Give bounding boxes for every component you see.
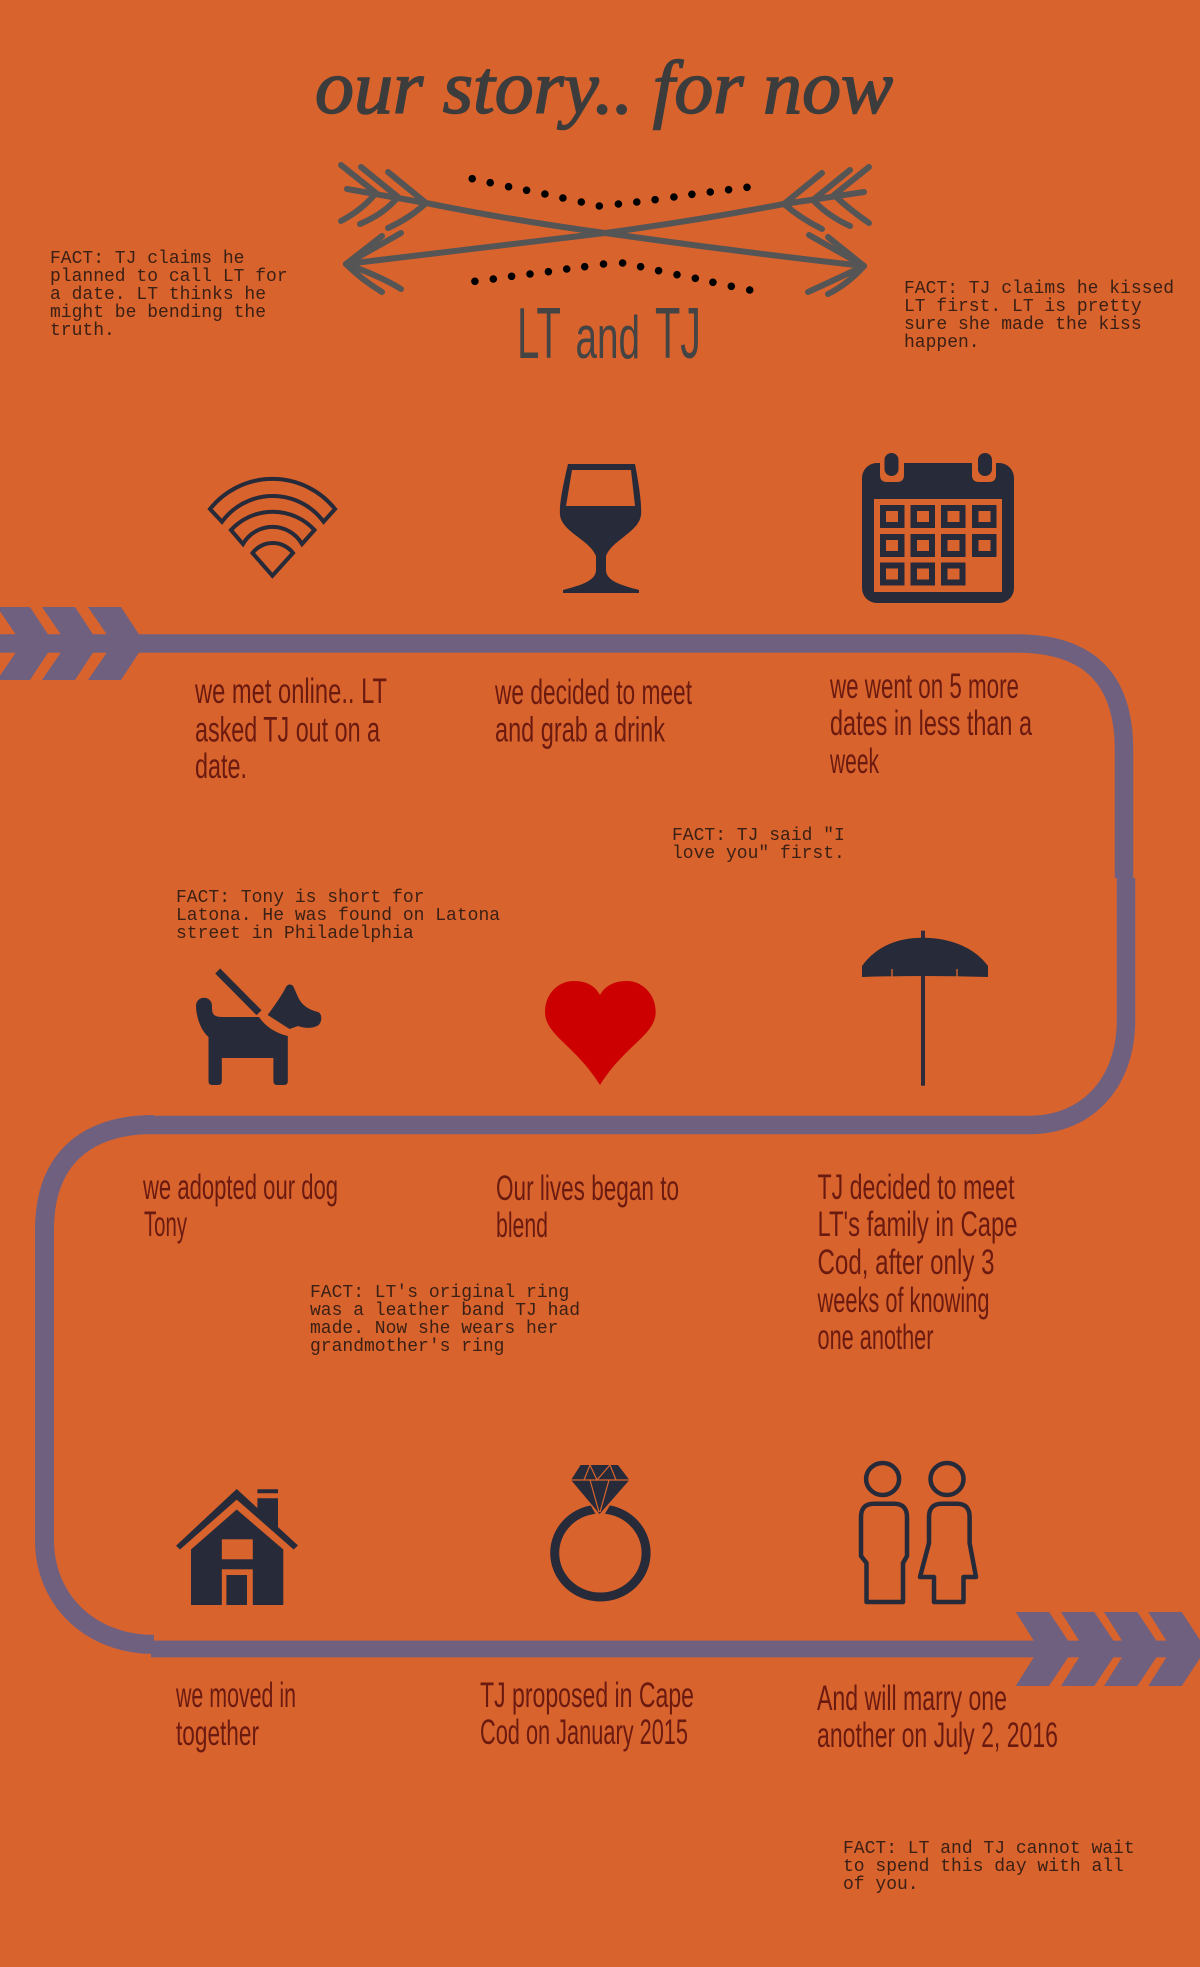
fact: cannot wait: to spend this day with all <box>843 1857 1124 1877</box>
fact: I love you: love you" first. <box>672 844 845 864</box>
step: met online <box>194 672 387 786</box>
fact: planned to call: might be bending the <box>50 303 266 323</box>
fact: original ring: FACT: LT's original ring <box>310 1283 569 1303</box>
step: Cape Cod family <box>817 1168 1018 1357</box>
subtitle: names: and <box>576 304 640 371</box>
step: Cape Cod family: one another <box>818 1318 934 1357</box>
step: wedding date <box>817 1679 1058 1755</box>
step: proposal: Cod on January 2015 <box>480 1713 688 1752</box>
step: met online: date. <box>195 747 247 786</box>
step: moved in: we moved in <box>175 1676 296 1715</box>
step: moved in: together <box>176 1714 259 1753</box>
step: lives blend: blend <box>496 1206 548 1245</box>
step: five more dates: week <box>829 742 879 781</box>
fact: cannot wait: of you. <box>843 1875 919 1895</box>
step: Cape Cod family: Cod, after only 3 <box>818 1243 994 1282</box>
step: wedding date: And will marry one <box>817 1679 1007 1718</box>
fact: cannot wait: FACT: LT and TJ cannot wait <box>843 1839 1135 1859</box>
dotted arc top <box>468 175 751 210</box>
fact: first kiss: LT first. LT is pretty <box>904 297 1142 317</box>
crossed arrows emblem <box>341 165 869 294</box>
step: lives blend: Our lives began to <box>496 1169 679 1208</box>
icon: dog on leash <box>196 971 321 1085</box>
step: proposal: TJ proposed in Cape <box>480 1676 694 1715</box>
step: wedding date: another on July 2, 2016 <box>817 1716 1058 1755</box>
start arrow fletching <box>0 607 145 680</box>
fact: planned to call: planned to call LT for <box>50 267 288 287</box>
icon: wifi <box>210 479 335 576</box>
fact: planned to call: a date. LT thinks he <box>50 285 266 305</box>
icon: couple <box>861 1463 976 1602</box>
step: grab a drink <box>494 673 692 750</box>
step: five more dates: dates in less than a <box>830 704 1032 743</box>
subtitle: names <box>517 294 701 374</box>
figure: woman <box>920 1463 976 1602</box>
timeline path <box>0 644 1200 1649</box>
arrow: tail upper left to head lower right <box>341 165 864 294</box>
step: Cape Cod family: LT's family in Cape <box>818 1205 1018 1244</box>
step: adopted dog: we adopted our dog <box>142 1168 338 1207</box>
fact: Tony's name: FACT: Tony is short for <box>176 888 424 908</box>
icon: wine glass <box>560 464 641 593</box>
step: met online: we met online.. LT <box>194 672 387 711</box>
step: adopted dog: Tony <box>144 1205 187 1244</box>
figure: man <box>861 1463 907 1602</box>
fact: first kiss: FACT: TJ claims he kissed <box>904 279 1174 299</box>
step: lives blend <box>496 1169 679 1245</box>
step: five more dates <box>829 667 1032 781</box>
step: Cape Cod family: weeks of knowing <box>817 1281 990 1320</box>
step: Cape Cod family: TJ decided to meet <box>818 1168 1015 1207</box>
subtitle: names: LT <box>517 294 561 374</box>
fact: first kiss: happen. <box>904 333 980 353</box>
subtitle: names: TJ <box>655 294 701 374</box>
icon: heart <box>545 981 656 1085</box>
end arrow fletching <box>1016 1612 1200 1686</box>
icon: calendar <box>862 453 1014 603</box>
fact: first kiss: sure she made the kiss <box>904 315 1142 335</box>
title: our story.. for now <box>315 46 893 130</box>
dotted arc bottom <box>471 259 754 294</box>
fact: Tony's name: Latona. He was found on Latona <box>176 906 500 926</box>
step: grab a drink: we decided to meet <box>494 673 692 712</box>
step: grab a drink: and grab a drink <box>495 711 665 750</box>
fact: planned to call: truth. <box>50 321 115 341</box>
fact: original ring: was a leather band TJ had <box>310 1301 580 1321</box>
fact: original ring: made. Now she wears her <box>310 1319 558 1339</box>
step: five more dates: we went on 5 more <box>829 667 1019 706</box>
fact: Tony's name: street in Philadelphia <box>176 924 414 944</box>
step: met online: asked TJ out on a <box>195 711 380 750</box>
icon: diamond ring <box>555 1465 646 1597</box>
step: moved in <box>175 1676 296 1753</box>
step: proposal <box>480 1676 694 1752</box>
icon: house <box>176 1489 298 1605</box>
fact: original ring: grandmother's ring <box>310 1337 504 1357</box>
arrow: head lower left to tail upper right <box>346 167 869 292</box>
fact: I love you: FACT: TJ said "I <box>672 826 845 846</box>
step: adopted dog <box>142 1168 338 1244</box>
icon: beach umbrella <box>862 931 988 1086</box>
fact: planned to call: FACT: TJ claims he <box>50 249 244 269</box>
